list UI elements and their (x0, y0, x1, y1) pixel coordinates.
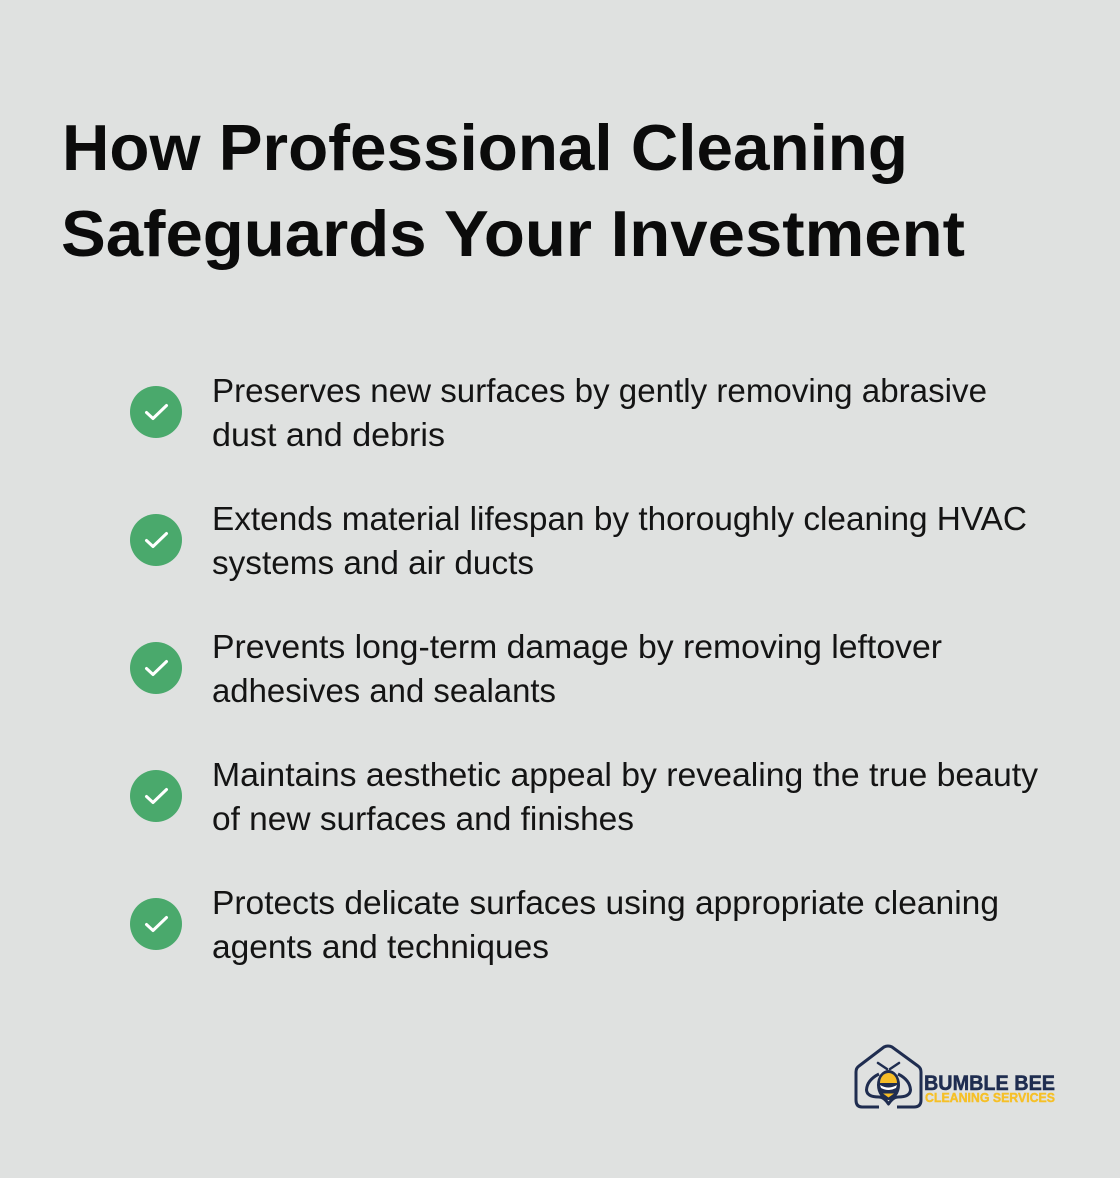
title: How Professional Cleaning (62, 111, 908, 184)
list item 4: Maintains aesthetic appeal by revealing the true beauty (212, 756, 1039, 793)
list item 5 (130, 884, 999, 965)
list item 4 (130, 756, 1039, 837)
list item 2: Extends material lifespan by thoroughly cleaning HVAC (212, 500, 1027, 537)
list item 5: agents and techniques (212, 928, 549, 965)
list item 3: adhesives and sealants (212, 672, 556, 709)
logo wordmark: BUMBLE BEE (924, 1072, 1055, 1095)
list item 3 (130, 628, 942, 709)
list item 1: Preserves new surfaces by gently removing abrasive (212, 372, 987, 409)
title (61, 111, 965, 270)
logo: Bumble Bee Cleaning Services (856, 1046, 1055, 1107)
list item 3: Prevents long-term damage by removing leftover (212, 628, 942, 665)
checklist (130, 372, 1039, 965)
list item 2: systems and air ducts (212, 544, 534, 581)
title: Safeguards Your Investment (61, 197, 965, 270)
logo tagline: CLEANING SERVICES (925, 1091, 1055, 1105)
list item 1: dust and debris (212, 416, 445, 453)
list item 2 (130, 500, 1027, 581)
list item 1 (130, 372, 987, 453)
list item 5: Protects delicate surfaces using appropriate cleaning (212, 884, 999, 921)
list item 4: of new surfaces and finishes (212, 800, 634, 837)
icon: house with bee (856, 1046, 921, 1107)
